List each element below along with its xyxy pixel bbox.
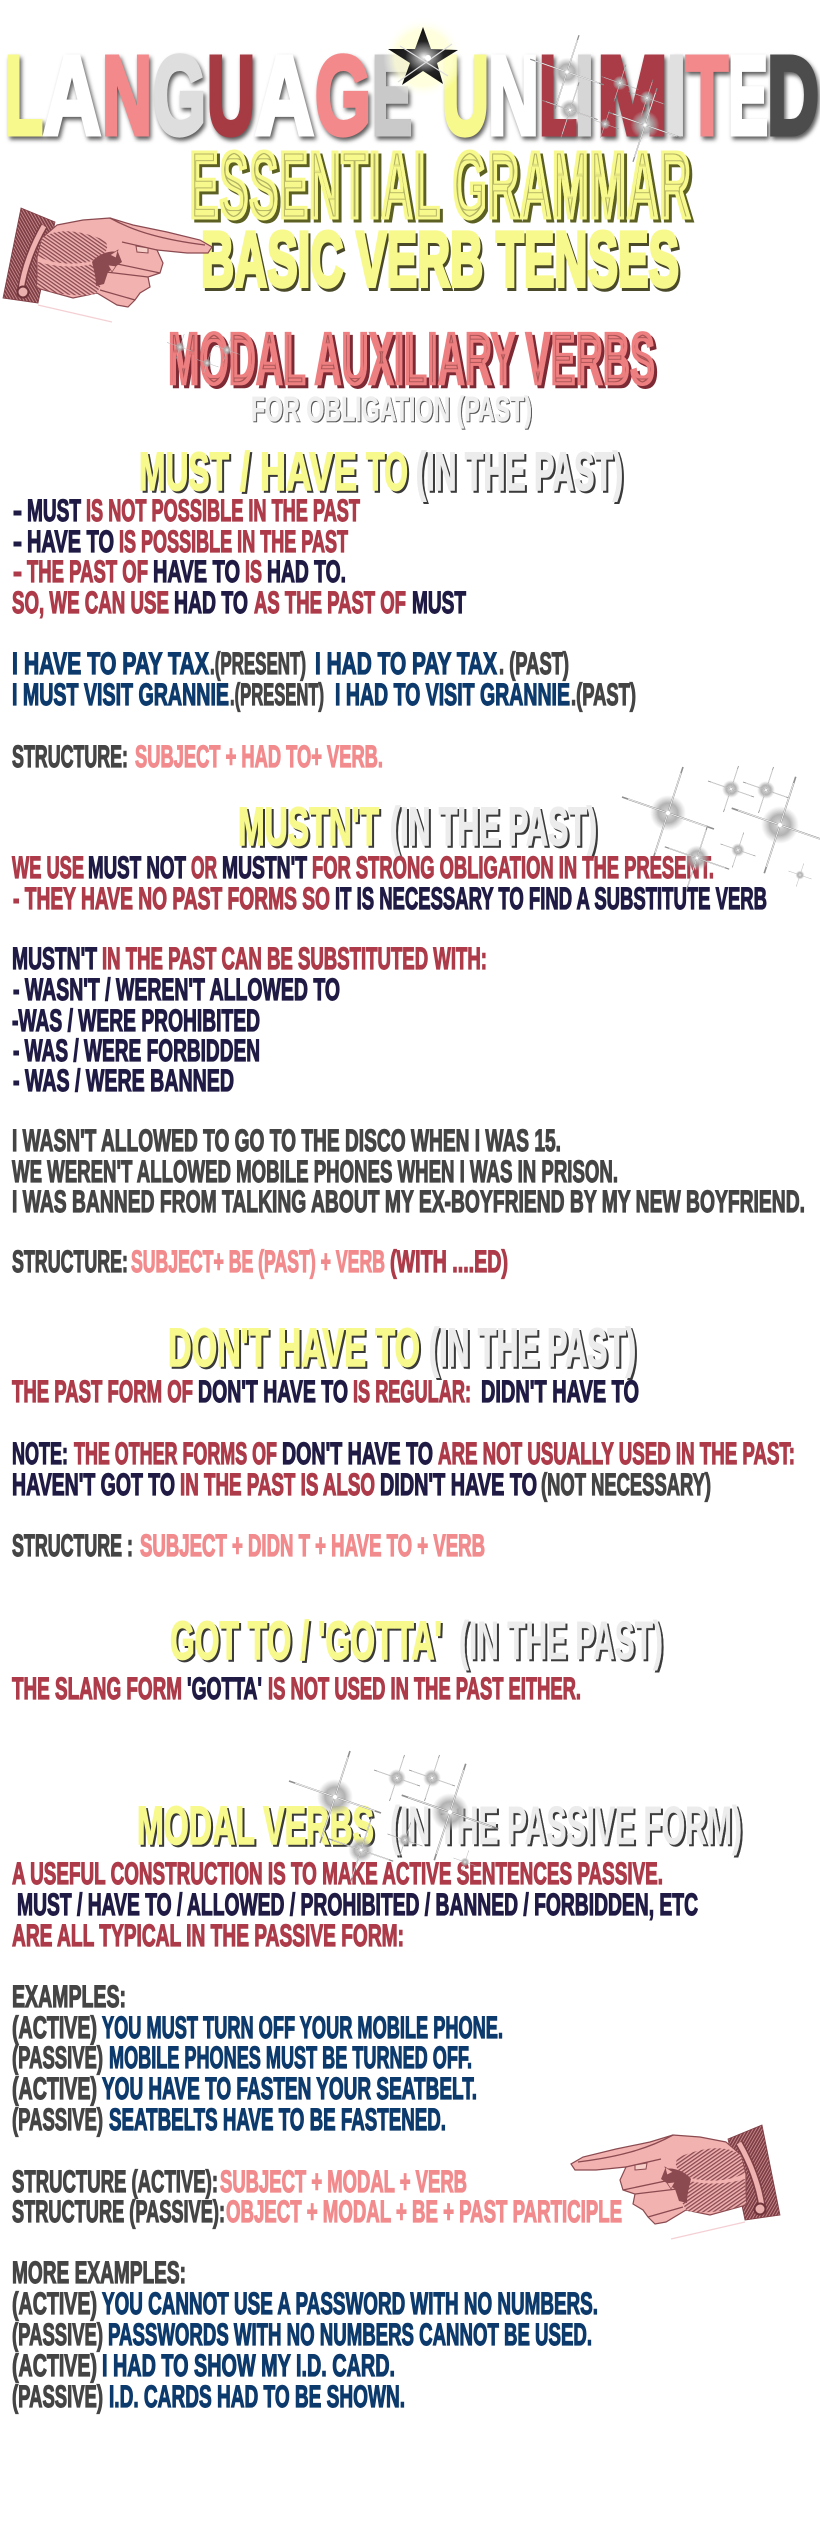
structure lines: STRUCTURE (ACTIVE):	[12, 2164, 218, 2199]
examples: (ACTIVE)	[12, 2010, 97, 2045]
section heading: GOT TO / 'GOTTA'	[170, 1611, 442, 1671]
icon: star	[383, 18, 463, 98]
section heading: (IN THE PAST)	[416, 442, 623, 502]
example sentences: . (PAST)	[499, 646, 569, 681]
title: Language Unlimited: E	[372, 33, 412, 158]
past form line	[12, 1374, 639, 1409]
section heading: DON'T HAVE TO	[168, 1318, 420, 1378]
structure line: STRUCTURE :	[12, 1528, 133, 1563]
past form line: DON'T HAVE TO	[198, 1374, 348, 1409]
rules text: THE PAST OF	[27, 554, 148, 589]
note text: IN THE PAST IS ALSO	[180, 1467, 375, 1502]
icon: pointing hand left	[3, 208, 212, 322]
section heading	[238, 797, 597, 857]
title: Language Unlimited: A	[43, 33, 101, 158]
subheading: For obligation (past): FOR OBLIGATION (PAST)	[251, 390, 532, 429]
rules text: -	[13, 554, 22, 589]
rules text: HAD TO.	[267, 554, 346, 589]
substitutes list: - WAS / WERE FORBIDDEN	[13, 1033, 260, 1068]
more examples	[12, 2255, 598, 2414]
rules text: SO, WE CAN USE	[12, 585, 169, 620]
more examples: (ACTIVE)	[12, 2286, 97, 2321]
structure line: (WITH ....ED)	[390, 1244, 508, 1279]
structure lines	[12, 2164, 622, 2229]
section heading: MODAL VERBS	[137, 1796, 374, 1856]
note text: THE OTHER FORMS OF	[74, 1436, 277, 1471]
example sentences: I MUST VISIT GRANNIE	[12, 677, 229, 712]
rules text: IS POSSIBLE IN THE PAST	[119, 524, 348, 559]
examples: (PASSIVE)	[12, 2102, 103, 2137]
explanation text: - THEY HAVE NO PAST FORMS SO	[13, 881, 330, 916]
title: Language Unlimited: I	[667, 33, 686, 158]
slang note	[12, 1671, 581, 1706]
note text: (NOT NECESSARY)	[541, 1467, 711, 1502]
more examples: I.D. CARDS HAD TO BE SHOWN.	[109, 2379, 405, 2414]
title: Language Unlimited: M	[597, 33, 668, 158]
explanation text	[12, 850, 767, 916]
section heading: /	[240, 442, 250, 502]
panel: modal verbs in the passive form	[12, 1796, 742, 2414]
title: Language Unlimited: N	[488, 33, 539, 158]
example sentences	[12, 646, 636, 712]
section heading: MUSTN'T	[238, 797, 379, 857]
examples: YOU MUST TURN OFF YOUR MOBILE PHONE.	[102, 2010, 503, 2045]
section heading	[137, 1796, 742, 1856]
section heading: (IN THE PAST)	[429, 1318, 636, 1378]
rules text: MUST	[27, 493, 81, 528]
title: Language Unlimited: U	[442, 33, 489, 158]
more examples: MORE EXAMPLES:	[12, 2255, 186, 2290]
substitutes list: - WASN'T / WEREN'T ALLOWED TO	[13, 972, 340, 1007]
examples: MOBILE PHONES MUST BE TURNED OFF.	[109, 2040, 472, 2075]
panel: got to / gotta in the past	[12, 1611, 663, 1706]
section heading	[139, 442, 623, 502]
rules text	[12, 493, 466, 620]
structure line	[12, 1528, 485, 1563]
panel: mustn't in the past	[12, 797, 805, 1279]
structure lines: STRUCTURE (PASSIVE):	[12, 2194, 225, 2229]
note text	[12, 1436, 795, 1502]
slang note: IS NOT USED IN THE PAST EITHER.	[268, 1671, 581, 1706]
title: Language Unlimited: A	[255, 33, 314, 158]
structure lines: SUBJECT + MODAL + VERB	[220, 2164, 467, 2199]
section heading: (IN THE PAST)	[390, 797, 597, 857]
more examples: (ACTIVE)	[12, 2348, 97, 2383]
title: Language Unlimited: U	[207, 33, 255, 158]
panel: must / have to in the past	[12, 442, 636, 774]
example sentences: .(PAST)	[571, 677, 636, 712]
icon: pointing hand right	[571, 2125, 780, 2239]
structure line: STRUCTURE:	[12, 739, 128, 774]
note text: HAVEN'T GOT TO	[12, 1467, 175, 1502]
rules text: -	[13, 493, 22, 528]
example sentences: .(PRESENT)	[210, 646, 306, 681]
title: Language Unlimited: T	[686, 33, 728, 158]
substitutes list: MUSTN'T	[12, 941, 97, 976]
section heading: TO	[366, 442, 408, 502]
more examples: (PASSIVE)	[12, 2379, 103, 2414]
rules text: AS THE PAST OF	[254, 585, 406, 620]
rules text: HAVE TO	[153, 554, 240, 589]
substitutes list: -WAS / WERE PROHIBITED	[12, 1003, 260, 1038]
rules text: HAD TO	[174, 585, 248, 620]
past form line: IS REGULAR:	[353, 1374, 471, 1409]
note text: DIDN'T HAVE TO	[380, 1467, 537, 1502]
note text: NOTE:	[12, 1436, 68, 1471]
title: Language Unlimited: L	[5, 33, 43, 158]
explanation text: WE USE	[12, 850, 84, 885]
example sentences: .(PRESENT)	[230, 677, 324, 712]
substitutes list	[12, 941, 487, 1098]
examples	[12, 1979, 503, 2137]
example sentences: I HAVE TO PAY TAX	[12, 646, 209, 681]
title: Language Unlimited: G	[315, 33, 371, 158]
rules text: MUST	[412, 585, 466, 620]
title: Language Unlimited: E	[728, 33, 768, 158]
rules text: HAVE TO	[27, 524, 114, 559]
slang note: THE SLANG FORM	[12, 1671, 182, 1706]
section heading: (IN THE PAST)	[459, 1611, 663, 1671]
icon: sparkle cluster on passive heading	[289, 1751, 498, 1882]
explanation text: MUSTN'T	[222, 850, 307, 885]
examples: (PASSIVE)	[12, 2040, 103, 2075]
icon: sparkle over present	[665, 826, 729, 890]
title: Language Unlimited	[5, 33, 819, 158]
title: Language Unlimited: L	[539, 33, 577, 158]
explanation text: OR	[191, 850, 217, 885]
rules text: IS	[245, 554, 262, 589]
title: Language Unlimited: N	[102, 33, 152, 158]
structure line: STRUCTURE:	[12, 1244, 128, 1279]
rules text: IS NOT POSSIBLE IN THE PAST	[86, 493, 360, 528]
examples: EXAMPLES:	[12, 1979, 126, 2014]
construction explanation	[12, 1856, 698, 1953]
explanation text: MUST NOT	[88, 850, 186, 885]
structure line	[12, 1244, 508, 1279]
past form line: DIDN'T HAVE TO	[481, 1374, 639, 1409]
past form line: THE PAST FORM OF	[12, 1374, 193, 1409]
title: Language Unlimited: I	[575, 33, 594, 158]
substitutes list: IN THE PAST CAN BE SUBSTITUTED WITH:	[102, 941, 487, 976]
examples: SEATBELTS HAVE TO BE FASTENED.	[109, 2102, 446, 2137]
icon: title sparkles	[530, 35, 682, 162]
structure line: SUBJECT+ BE (PAST) + VERB	[131, 1244, 385, 1279]
construction explanation: ARE ALL TYPICAL IN THE PASSIVE FORM:	[12, 1918, 404, 1953]
section heading: HAVE	[260, 442, 357, 502]
example sentences: I HAD TO VISIT GRANNIE	[335, 677, 570, 712]
rules text: -	[13, 524, 22, 559]
example sentences: I HAD TO PAY TAX	[315, 646, 497, 681]
section heading: MUST	[139, 442, 229, 502]
title: Language Unlimited: G	[153, 33, 206, 158]
panel: don't have to in the past	[12, 1318, 795, 1563]
example sentences	[12, 1123, 805, 1219]
examples: (ACTIVE)	[12, 2071, 97, 2106]
note text: DON'T HAVE TO	[282, 1436, 433, 1471]
icon: sparkles on Modal	[167, 334, 240, 374]
structure line	[12, 739, 383, 774]
more examples: (PASSIVE)	[12, 2317, 103, 2352]
substitutes list: - WAS / WERE BANNED	[13, 1063, 234, 1098]
examples: YOU HAVE TO FASTEN YOUR SEATBELT.	[102, 2071, 477, 2106]
structure line: SUBJECT + DIDN T + HAVE TO + VERB	[140, 1528, 485, 1563]
structure line: SUBJECT + HAD TO+ VERB.	[135, 739, 383, 774]
more examples: I HAD TO SHOW MY I.D. CARD.	[102, 2348, 395, 2383]
icon: sparkle cluster right	[622, 766, 820, 886]
slang note: 'GOTTA'	[187, 1671, 262, 1706]
